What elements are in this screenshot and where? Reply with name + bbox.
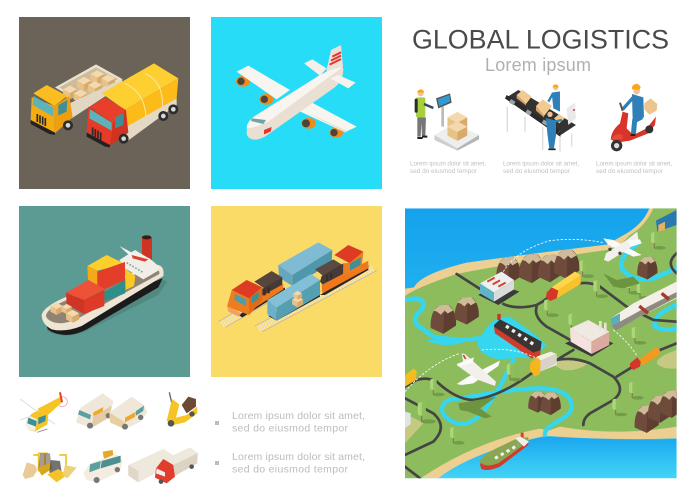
icon: helicopter <box>20 392 67 432</box>
cargo boxes <box>50 303 79 323</box>
factory building <box>478 272 519 305</box>
mountains <box>431 250 684 433</box>
left edge building <box>405 412 411 428</box>
covered truck <box>87 63 178 147</box>
hull <box>42 265 167 336</box>
rear locomotive <box>315 245 368 295</box>
dashed flight paths <box>405 239 637 392</box>
lagoons and rivers <box>405 243 677 435</box>
panel: freight trains <box>211 206 382 377</box>
subtitle: Lorem ipsum <box>485 55 591 75</box>
fuselage <box>247 45 356 140</box>
warehouse <box>656 210 677 232</box>
text block: bullet one: sed do eiusmod tempor <box>232 422 348 434</box>
panel: logistics map <box>405 208 684 478</box>
icon: roof-sign van <box>83 450 123 483</box>
text: caption 3: sed do eiusmod tempor <box>596 168 664 175</box>
text: caption 2: sed do eiusmod tempor <box>503 168 571 175</box>
yellow truck <box>546 272 581 301</box>
front locomotive <box>227 271 285 317</box>
green tanker ship <box>479 433 529 470</box>
icon: yellow scooter <box>167 392 197 427</box>
front wagon with boxes <box>267 274 320 321</box>
text: caption 3 <box>596 160 672 175</box>
rail tracks <box>218 265 377 332</box>
plane shadows <box>458 273 640 418</box>
text: caption 3: Lorem ipsum dolor sit amet, <box>596 160 672 168</box>
coastal sand <box>405 208 677 478</box>
map plane upper <box>603 232 642 262</box>
text: caption 1: sed do eiusmod tempor <box>410 168 478 175</box>
funnel and bridge <box>119 235 159 279</box>
distribution building <box>565 320 613 357</box>
cargo ship in bay <box>494 314 542 358</box>
icon: weighing scale with worker <box>415 89 479 151</box>
text: caption 2 <box>503 160 579 175</box>
panel: cargo plane <box>211 17 382 189</box>
text: caption 1: Lorem ipsum dolor sit amet, <box>410 160 486 168</box>
text block: bullet two: sed do eiusmod tempor <box>232 464 348 476</box>
text block: bullet one <box>215 410 365 434</box>
text block: bullet two <box>215 451 365 476</box>
icon: delivery vans <box>76 393 147 430</box>
lower sea <box>438 437 677 478</box>
van truck <box>530 352 557 377</box>
roads <box>405 253 677 478</box>
wings <box>237 66 357 132</box>
containers <box>66 255 135 314</box>
panel: container ship <box>19 206 190 377</box>
tanker truck <box>630 347 660 370</box>
left edge truck <box>405 368 417 387</box>
engines <box>236 76 343 138</box>
map plane lower <box>457 353 500 386</box>
text: caption 1 <box>410 160 486 175</box>
sand patches <box>405 350 677 443</box>
title: GLOBAL LOGISTICS <box>412 24 669 54</box>
panel: trucks <box>19 17 190 189</box>
text: caption 2: Lorem ipsum dolor sit amet, <box>503 160 579 168</box>
land <box>405 208 677 478</box>
trees <box>418 232 666 445</box>
flatbed truck <box>31 64 122 135</box>
icon: forklifts <box>23 453 77 482</box>
sea <box>405 208 677 478</box>
icon: lorries <box>128 447 198 484</box>
text block: bullet one: Lorem ipsum dolor sit amet, <box>232 410 365 422</box>
rear wagon <box>278 242 332 286</box>
icon: conveyor belt with workers <box>505 84 576 152</box>
freight train <box>611 282 677 331</box>
bays <box>477 317 547 359</box>
text block: bullet two: Lorem ipsum dolor sit amet, <box>232 451 365 463</box>
icon: courier on scooter <box>611 84 657 151</box>
